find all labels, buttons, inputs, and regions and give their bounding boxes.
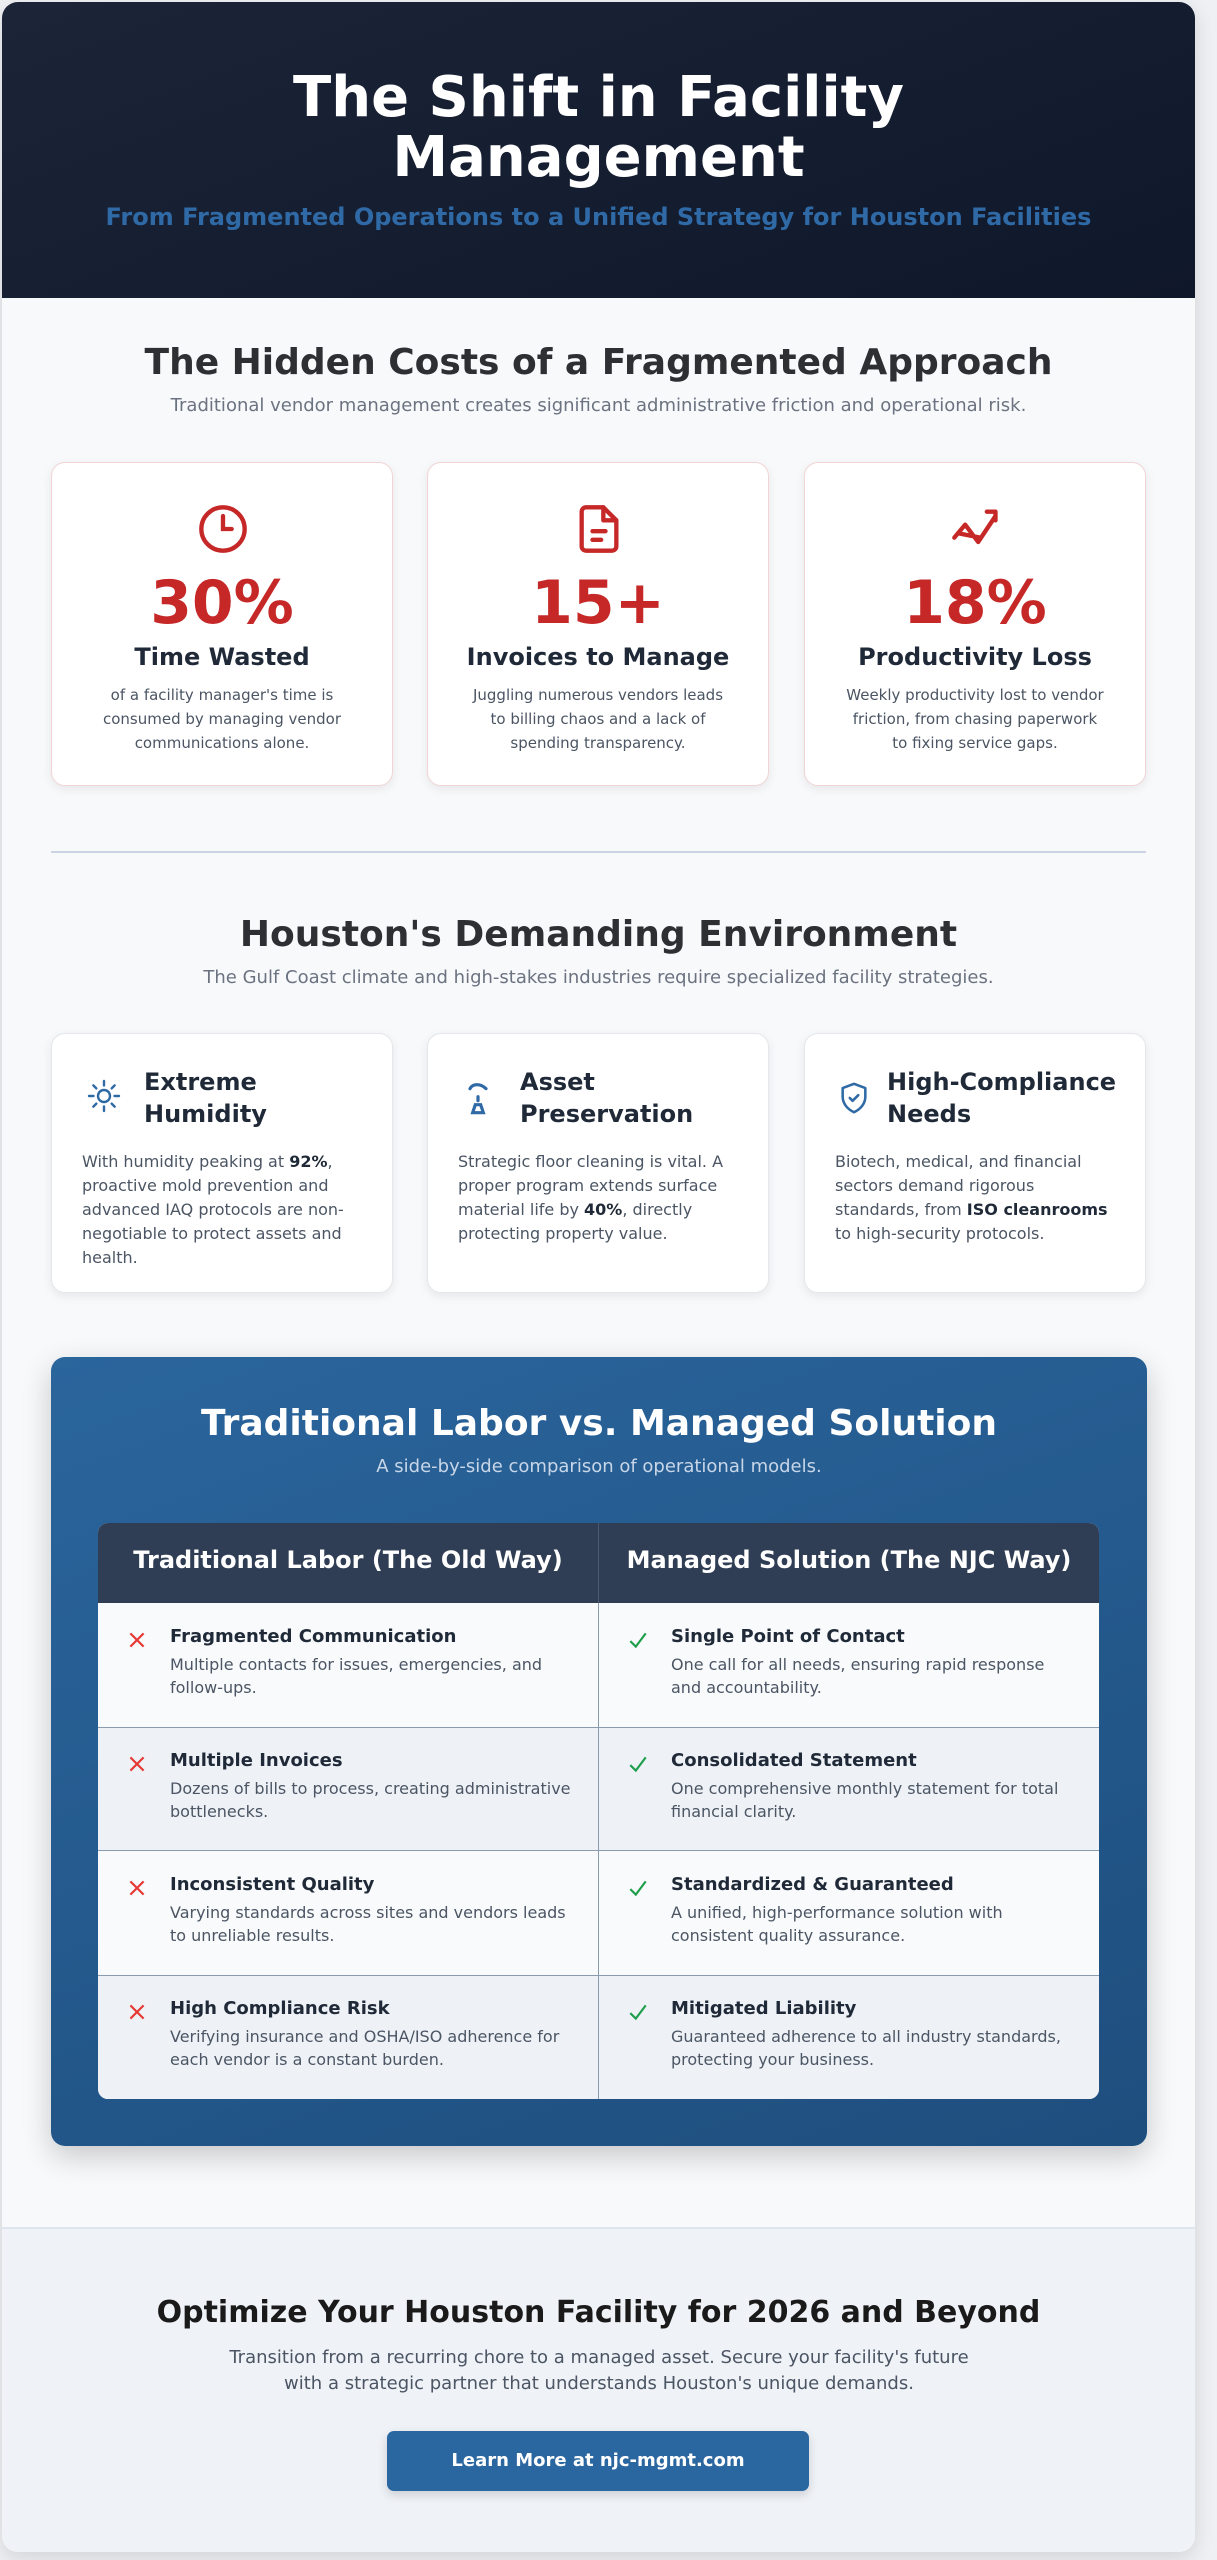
title: [293, 65, 904, 190]
icon: document: [580, 505, 618, 553]
section heading: hidden costs: The Hidden Costs of a Fragmented Approach: [145, 342, 1052, 383]
icon: shield: [841, 1082, 867, 1114]
comparison table: [98, 1523, 1099, 2099]
card: time wasted: [51, 462, 393, 786]
title: The Shift in Facility: [293, 65, 904, 130]
row 4 left: [130, 1998, 560, 2069]
row 1 right: [630, 1626, 1044, 1697]
row 2 left: Dozens of bills to process, creating administrative: [170, 1779, 571, 1798]
row 4 left: High Compliance Risk: [170, 1998, 390, 2019]
icon: spray: [468, 1083, 488, 1114]
row 3 right: consistent quality assurance.: [671, 1926, 905, 1945]
row 4 left: Verifying insurance and OSHA/ISO adherence for: [170, 2027, 559, 2046]
card text: Strategic floor cleaning is vital. A proper program extends surface material life by 40%, directly protecting property value.: [458, 1152, 723, 1243]
panel: comparison: [51, 1357, 1147, 2146]
stat label: Invoices to Manage: [467, 643, 729, 671]
card text: With humidity peaking at 92%, proactive mold prevention and advanced IAQ protocols are non-negotiable to protect assets and health.: [82, 1152, 344, 1267]
footer CTA section: [2, 2227, 1195, 2552]
row 2 left: bottlenecks.: [170, 1802, 268, 1821]
stat description: of a facility manager's time is consumed by managing vendor communications alone.: [103, 686, 341, 752]
section heading: environment: Houston's Demanding Environment: [240, 914, 957, 955]
card title: [144, 1068, 267, 1128]
stat number: 18%: [903, 568, 1047, 638]
card title: Preservation: [520, 1100, 693, 1128]
comparison title: Traditional Labor vs. Managed Solution: [201, 1403, 997, 1444]
table header: Managed Solution (The NJC Way): [627, 1546, 1071, 1574]
row 2 right: One comprehensive monthly statement for total: [671, 1779, 1058, 1798]
stat label: Productivity Loss: [858, 643, 1092, 671]
stat number: 15+: [531, 568, 665, 638]
row 1 left: Multiple contacts for issues, emergencies, and: [170, 1655, 542, 1674]
row 4 right: Guaranteed adherence to all industry standards,: [671, 2027, 1061, 2046]
section subheading: Traditional vendor management creates significant administrative friction and operational risk.: [171, 395, 1026, 416]
row 3 left: Inconsistent Quality: [170, 1874, 374, 1895]
card: asset preservation: [427, 1033, 769, 1293]
row 3 right: A unified, high-performance solution with: [671, 1903, 1003, 1922]
card title: Asset: [520, 1068, 595, 1096]
row 4 right: [630, 1998, 1061, 2069]
subtitle: From Fragmented Operations to a Unified Strategy for Houston Facilities: [106, 203, 1091, 231]
row 2 left: [130, 1750, 571, 1821]
table header: [98, 1523, 1099, 1603]
row 4 right: protecting your business.: [671, 2050, 874, 2069]
card title: Extreme: [144, 1068, 257, 1096]
CTA button: [387, 2431, 809, 2491]
card title: [520, 1068, 693, 1128]
row 3 left: Varying standards across sites and vendors leads: [170, 1903, 566, 1922]
CTA heading: Optimize Your Houston Facility for 2026 and Beyond: [157, 2295, 1040, 2330]
row 1 right: and accountability.: [671, 1678, 822, 1697]
icon: sun: [88, 1080, 120, 1112]
CTA button: Learn More at njc-mgmt.com: [451, 2450, 745, 2471]
card text: Biotech, medical, and financial: [835, 1152, 1082, 1171]
stat label: Time Wasted: [134, 643, 310, 671]
card text: [835, 1152, 1108, 1243]
card text: sectors demand rigorous: [835, 1176, 1034, 1195]
row 3 left: to unreliable results.: [170, 1926, 334, 1945]
card title: High-Compliance: [887, 1068, 1116, 1096]
row 1 left: Fragmented Communication: [170, 1626, 456, 1647]
row 2 right: [630, 1750, 1058, 1821]
row 2 left: Multiple Invoices: [170, 1750, 343, 1771]
stat number: 30%: [150, 568, 294, 638]
stat description: Weekly productivity lost to vendor friction, from chasing paperwork to fixing service gaps.: [846, 686, 1104, 752]
icon: trend down: [952, 510, 998, 544]
row 2 right: Consolidated Statement: [671, 1750, 917, 1771]
card title: Needs: [887, 1100, 971, 1128]
header: [2, 2, 1195, 298]
row 1 right: Single Point of Contact: [671, 1626, 905, 1647]
title: Management: [392, 125, 805, 190]
row 1 left: follow-ups.: [170, 1678, 257, 1697]
stat description: Juggling numerous vendors leads to billing chaos and a lack of spending transparency.: [473, 686, 723, 752]
card: compliance: [804, 1033, 1146, 1293]
row 4 left: each vendor is a constant burden.: [170, 2050, 444, 2069]
row 1 left: [130, 1626, 542, 1697]
card text: to high-security protocols.: [835, 1224, 1044, 1243]
row 3 right: [630, 1874, 1003, 1945]
row 2 right: financial clarity.: [671, 1802, 796, 1821]
row 3 right: Standardized & Guaranteed: [671, 1874, 954, 1895]
icon: clock: [199, 505, 247, 553]
card text: standards, from ISO cleanrooms: [835, 1200, 1108, 1219]
row 4 right: Mitigated Liability: [671, 1998, 856, 2019]
table header: Traditional Labor (The Old Way): [133, 1546, 563, 1574]
card: invoices: [427, 462, 769, 786]
card title: [887, 1068, 1116, 1128]
card: productivity: [804, 462, 1146, 786]
card: humidity: [51, 1033, 393, 1293]
section subheading: The Gulf Coast climate and high-stakes industries require specialized facility strategies.: [203, 967, 994, 988]
row 1 right: One call for all needs, ensuring rapid response: [671, 1655, 1044, 1674]
CTA text: Transition from a recurring chore to a managed asset. Secure your facility's future with a strategic partner that understands Houston's unique demands.: [229, 2347, 969, 2394]
comparison subtitle: A side-by-side comparison of operational models.: [376, 1456, 822, 1477]
row 3 left: [130, 1874, 566, 1945]
card title: Humidity: [144, 1100, 267, 1128]
